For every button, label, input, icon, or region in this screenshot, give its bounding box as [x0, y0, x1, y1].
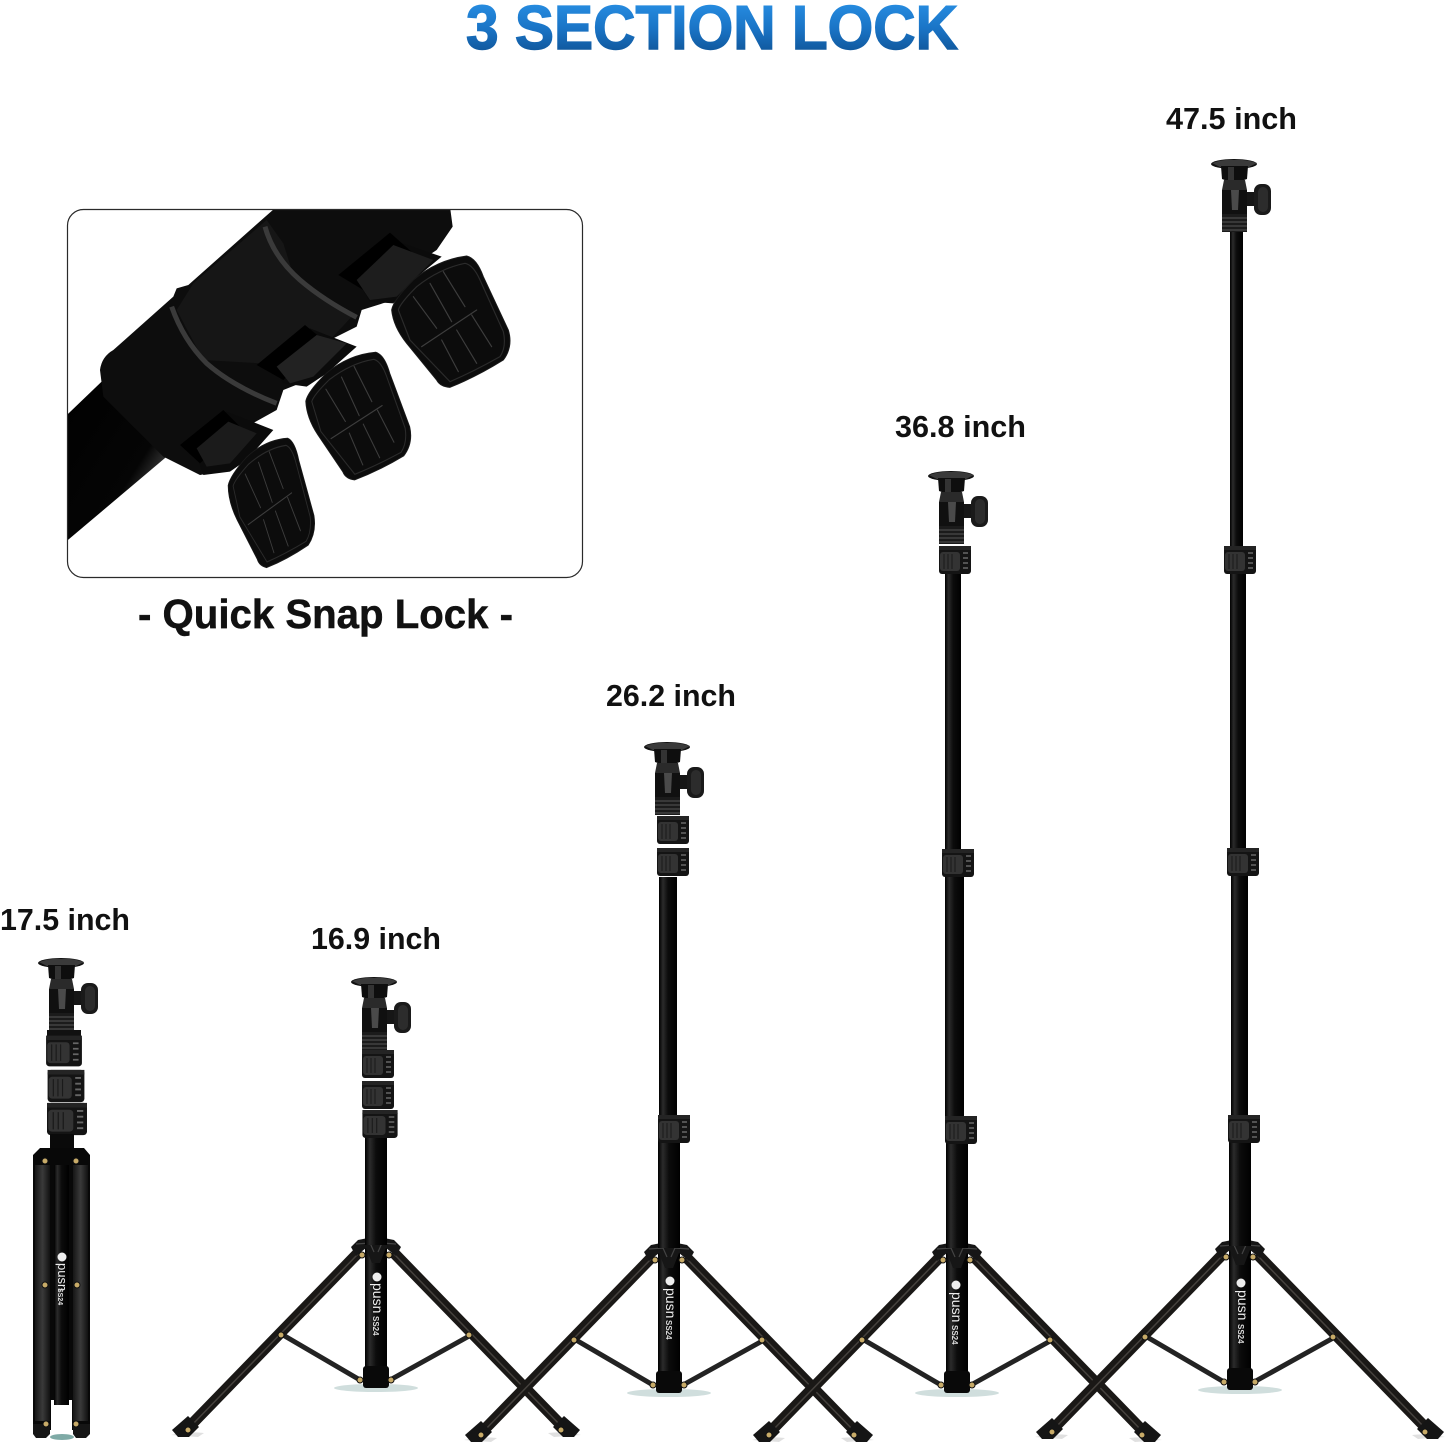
tripod: 26.2 inch: SS24: [664, 1320, 673, 1340]
tripod: 26.2 inch: pusn: [663, 1288, 679, 1318]
tripod: 16.9 inch: [171, 977, 581, 1437]
label: 47.5 inch: 47.5 inch: [1166, 101, 1297, 136]
lock tab 2: [302, 348, 415, 483]
label: 26.2 inch: 26.2 inch: [606, 678, 736, 713]
tripod: 47.5 inch: [1035, 159, 1445, 1439]
tripod: 47.5 inch: pusn: [1235, 1290, 1251, 1320]
tripod: 16.9 inch: SS24: [371, 1316, 380, 1336]
tripod: 36.8 inch: [752, 471, 1162, 1442]
panel: quick snap lock close-up: [60, 207, 583, 578]
tripod: 36.8 inch: pusn: [949, 1292, 965, 1322]
lock tab 3: [392, 256, 510, 387]
label: 16.9 inch: 16.9 inch: [311, 921, 441, 956]
label: 36.8 inch: 36.8 inch: [895, 409, 1026, 444]
tripod: folded 17.5 inch: pusn: [55, 1263, 70, 1291]
tripod: 47.5 inch: SS24: [1236, 1324, 1245, 1344]
tripod: folded 17.5 inch: [33, 958, 98, 1440]
lock tab 1: [228, 438, 315, 568]
tripod: 16.9 inch: pusn: [370, 1283, 386, 1313]
tripod: 36.8 inch: SS24: [950, 1325, 959, 1345]
tube: [68, 382, 166, 540]
tripod: 26.2 inch: [464, 742, 874, 1442]
lock collars: [100, 207, 453, 475]
tripod: folded 17.5 inch: SS24: [56, 1288, 63, 1305]
label: 17.5 inch: 17.5 inch: [0, 902, 130, 937]
tab hinges: [193, 240, 442, 475]
panel caption: - Quick Snap Lock -: [138, 591, 513, 637]
